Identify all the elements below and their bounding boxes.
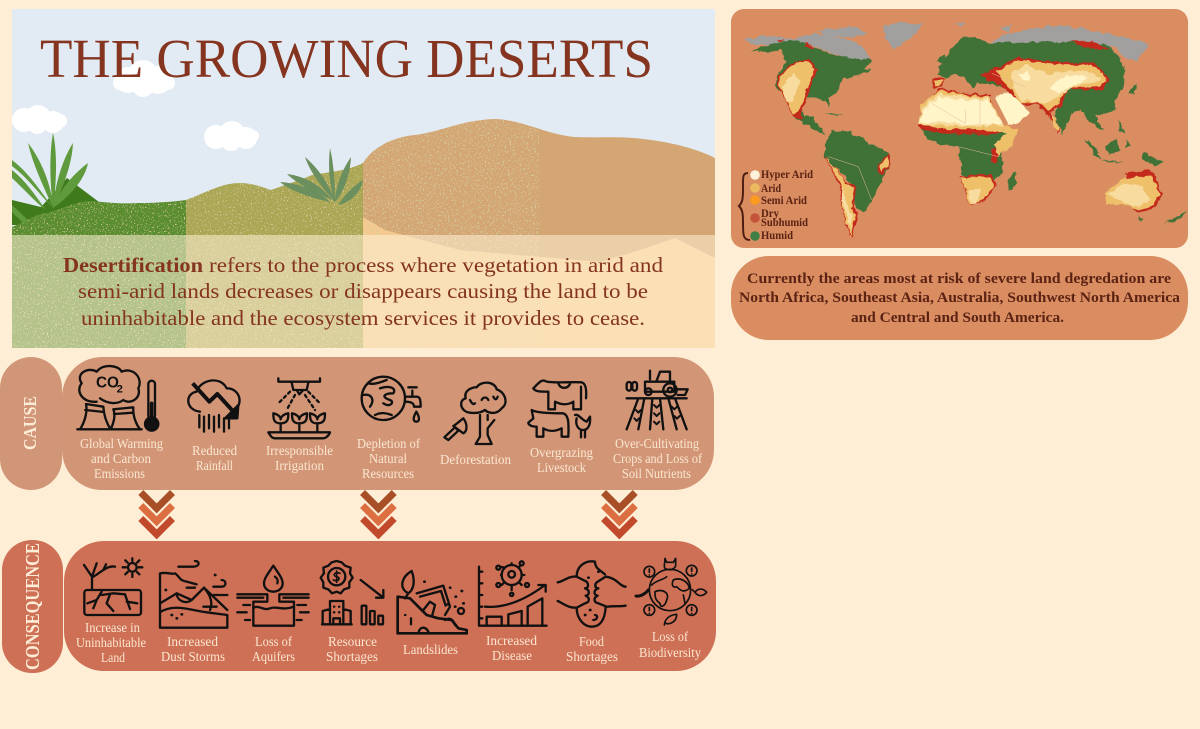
callout: areas most at risk: Currently the areas most at risk of severe land degredation are (747, 271, 1171, 287)
map background (731, 9, 1188, 248)
label: increase in uninhabitable land (76, 620, 146, 665)
icon: CO2 factories and thermometer: 2 (117, 384, 123, 396)
icon: reduced rainfall (188, 380, 240, 432)
icon: resource shortages (321, 561, 383, 624)
panel: consequences (64, 541, 716, 671)
dry subhumid red fringe (777, 39, 1162, 237)
callout: areas most at risk (731, 256, 1188, 340)
label: loss of aquifers: Loss of (255, 634, 292, 649)
legend: dry subhumid (750, 208, 809, 229)
country borders (828, 73, 1025, 200)
legend: dry subhumid: Subhumid (761, 217, 809, 229)
panel: cause label (0, 357, 62, 490)
label: loss of aquifers (252, 634, 295, 664)
icon: globe with tap (362, 377, 421, 422)
label: loss of biodiversity (639, 629, 701, 660)
semi arid and arid tan zones (778, 60, 1160, 236)
icon: landslide (398, 571, 467, 633)
label: over-cultivating: Over-Cultivating (615, 436, 699, 451)
icon: aquifer water drop (237, 566, 309, 626)
translucent text overlay (12, 235, 715, 348)
label: overgrazing livestock: Livestock (537, 460, 586, 475)
pale arid and hyper arid zones (782, 65, 1149, 232)
arctic grey land (743, 23, 1149, 62)
label: global warming: and Carbon (91, 451, 151, 466)
label: reduced rainfall: Rainfall (196, 458, 233, 473)
panel: cause label: CAUSE (20, 396, 40, 450)
icon: left plant (12, 133, 88, 224)
label: increased dust storms: Increased (167, 634, 218, 649)
label: food shortages: Food (579, 634, 604, 649)
icon: dust storm over mountains (160, 561, 227, 628)
definition text: uninhabitable and the ecosystem services it provides to cease. (81, 306, 645, 330)
label: resource shortages: Shortages (326, 649, 378, 664)
label: depletion of natural resources: Depletion of (357, 436, 420, 451)
label: landslides: Landslides (403, 642, 458, 657)
callout: areas most at risk: and Central and South America. (851, 310, 1064, 326)
definition text: refers to the process where vegetation in arid and (209, 253, 664, 277)
label: loss of aquifers: Aquifers (252, 649, 295, 664)
icon: clouds (12, 60, 259, 151)
icon: CO2 factories and thermometer (77, 366, 158, 431)
legend: humid: Humid (761, 230, 794, 242)
icon: livestock (528, 381, 590, 437)
icon: middle plant (280, 148, 363, 205)
label: reduced rainfall: Reduced (192, 443, 237, 458)
icon: disease chart (479, 561, 547, 626)
definition text: Desertification (63, 253, 203, 277)
legend: hyper arid: Hyper Arid (761, 169, 814, 181)
label: irresponsible irrigation: Irresponsible (266, 443, 333, 458)
label: over-cultivating: Crops and Loss of (613, 451, 702, 466)
definition text: semi-arid lands decreases or disappears causing the land to be (78, 279, 648, 303)
label: over-cultivating (613, 436, 702, 481)
title: THE GROWING DESERTS (40, 28, 653, 89)
panel: consequence label: CONSEQUENCE (22, 543, 44, 670)
label: depletion of natural resources: Natural (369, 451, 407, 466)
icon: CO2 factories and thermometer: CO (96, 374, 119, 391)
label: global warming: Emissions (94, 466, 145, 481)
label: over-cultivating: Soil Nutrients (622, 466, 691, 481)
icon: cracked land with dead tree and sun (84, 558, 142, 615)
label: overgrazing livestock (530, 445, 593, 475)
landscape hills (12, 115, 715, 348)
panel: causes (62, 357, 714, 490)
panel: hero landscape with title and definition (12, 9, 715, 348)
label: food shortages: Shortages (566, 649, 618, 664)
panel: consequence label (2, 540, 63, 673)
label: increase in uninhabitable land: Land (101, 650, 125, 665)
legend: semi arid: Semi Arid (761, 195, 808, 207)
label: loss of biodiversity: Biodiversity (639, 645, 701, 660)
icon: food shortages, fists and bread (558, 561, 626, 627)
callout: areas most at risk: North Africa, Southeast Asia, Australia, Southwest North America (739, 290, 1181, 306)
label: increase in uninhabitable land: Uninhabitable (76, 635, 146, 650)
icon: irrigation sprinkler (268, 378, 330, 438)
Red Sea gap (988, 96, 1008, 126)
label: depletion of natural resources (357, 436, 420, 481)
icon: tractor and field (627, 371, 688, 429)
definition text (63, 253, 664, 330)
sky (12, 9, 715, 348)
label: increased dust storms: Dust Storms (161, 649, 225, 664)
label: resource shortages (326, 634, 378, 664)
label: increased dust storms (161, 634, 225, 664)
label: increase in uninhabitable land: Increase in (85, 620, 140, 635)
arrow: chevrons right (601, 490, 638, 539)
label: loss of biodiversity: Loss of (652, 629, 688, 644)
label: reduced rainfall (192, 443, 237, 473)
label: irresponsible irrigation (266, 443, 333, 473)
label: overgrazing livestock: Overgrazing (530, 445, 593, 460)
label: increased disease: Disease (492, 648, 532, 663)
label: increased disease (486, 633, 537, 663)
world map (743, 23, 1187, 237)
legend: dry subhumid: Dry (761, 208, 779, 220)
label: increased disease: Increased (486, 633, 537, 648)
label: global warming (80, 436, 163, 481)
label: irresponsible irrigation: Irrigation (275, 458, 324, 473)
legend (739, 169, 814, 242)
panel: world map of dryland zones (731, 9, 1188, 248)
humid green land (750, 37, 1187, 225)
legend brace (739, 173, 750, 240)
icon: biodiversity globe (636, 558, 707, 625)
label: global warming: Global Warming (80, 436, 163, 451)
label: food shortages (566, 634, 618, 664)
label: deforestation: Deforestation (440, 452, 511, 467)
legend: arid: Arid (761, 183, 782, 195)
arrow: chevrons left (138, 490, 175, 539)
icon: tree and axe (444, 383, 506, 444)
arrow: chevrons middle (360, 490, 397, 539)
label: resource shortages: Resource (328, 634, 377, 649)
label: depletion of natural resources: Resources (362, 466, 414, 481)
